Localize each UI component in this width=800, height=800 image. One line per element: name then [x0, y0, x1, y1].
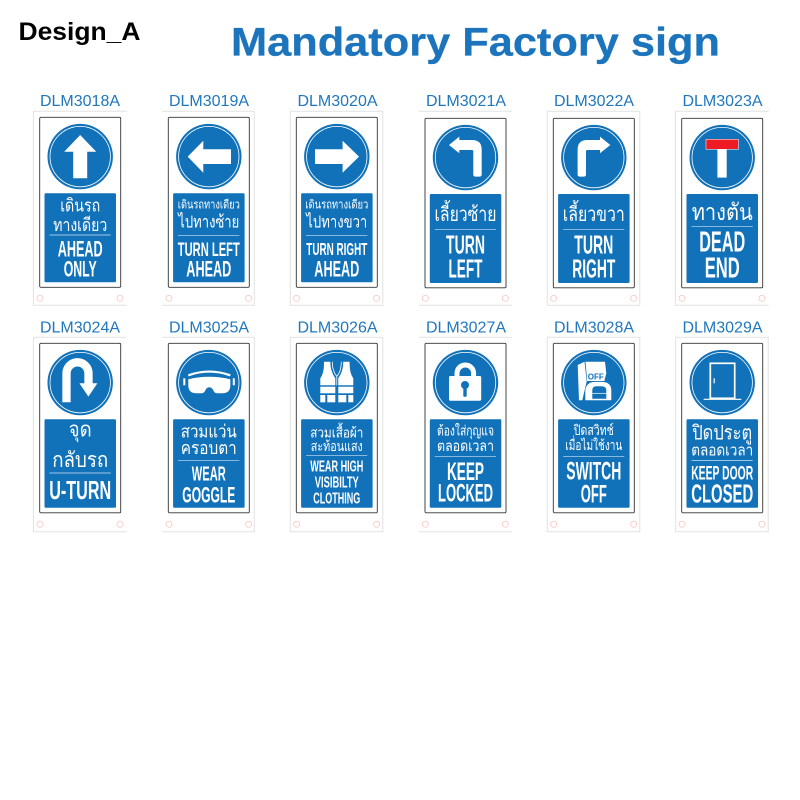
sign frame: [553, 118, 634, 288]
text panel: สวมแว่น: [181, 422, 237, 442]
title: Mandatory Factory sign: [231, 20, 720, 64]
text panel: เดินรถ: [60, 196, 100, 216]
icon: goggles: [176, 350, 242, 415]
sign: turn left ahead: [162, 111, 254, 305]
text panel: ครอบตา: [181, 438, 237, 458]
text panel: กลับรถ: [52, 449, 108, 472]
design label: Design_A: [18, 18, 140, 46]
panel outline: [290, 111, 383, 305]
text panel: [301, 193, 373, 282]
icon: right turn arrow: [561, 125, 626, 190]
text panel: [430, 419, 501, 508]
sign frame: [40, 343, 121, 513]
sign frame: [682, 118, 763, 288]
code label DLM3020A: DLM3020A: [297, 93, 378, 110]
panel outline: [33, 337, 127, 532]
panel outline: [162, 111, 254, 305]
code label DLM3029A: DLM3029A: [682, 320, 763, 336]
text panel: ปิดประตู: [692, 422, 752, 445]
text panel: CLOSED: [691, 478, 753, 508]
sign: keep locked: [419, 337, 512, 532]
mounting holes: [679, 521, 765, 527]
sign frame: [553, 343, 634, 513]
icon: safety vest: [304, 350, 370, 415]
text panel: [430, 194, 501, 283]
text panel: AHEAD: [186, 257, 231, 282]
panel outline: [290, 337, 383, 532]
text panel: ตลอดเวลา: [437, 438, 494, 455]
code label DLM3021A: DLM3021A: [426, 93, 506, 110]
text panel: ปิดสวิทช์: [573, 422, 614, 438]
icon: dead end T: [690, 125, 755, 190]
sign: ahead only: [33, 111, 127, 305]
sign: dead end: [675, 111, 769, 305]
sign frame: [168, 117, 249, 287]
mounting holes: [551, 295, 637, 301]
mounting holes: [294, 295, 380, 301]
icon: left turn arrow: [433, 125, 498, 190]
text panel: [558, 194, 630, 283]
icon: up arrow: [48, 124, 113, 189]
text panel: เมื่อไม่ใช้งาน: [565, 436, 623, 453]
panel outline: [547, 111, 640, 305]
icon: right arrow: [304, 124, 370, 189]
text panel: AHEAD: [58, 237, 103, 262]
text panel: TURN: [446, 229, 485, 259]
sign: wear high visibility clothing: [290, 337, 383, 532]
sign frame: [425, 118, 506, 288]
panel outline: [419, 111, 512, 305]
text panel: CLOTHING: [313, 490, 360, 507]
mounting holes: [679, 295, 765, 301]
text panel: สะท้อนแสง: [311, 438, 363, 454]
text panel: ตลอดเวลา: [691, 443, 753, 460]
text panel: KEEP: [447, 459, 484, 486]
sign frame: [682, 343, 763, 513]
code label DLM3019A: DLM3019A: [169, 93, 249, 110]
text panel: [173, 193, 245, 282]
text panel: [301, 419, 373, 508]
panel outline: [547, 337, 640, 532]
icon: off switch machine: OFF: [588, 372, 604, 382]
text panel: ไปทางขวา: [305, 211, 367, 231]
text panel: OFF: [581, 481, 607, 508]
icon: door: [690, 350, 755, 415]
mounting holes: [37, 521, 123, 527]
sign frame: [296, 343, 377, 513]
panel outline: [676, 337, 768, 532]
text panel: DEAD: [699, 227, 745, 259]
code label DLM3023A: DLM3023A: [682, 93, 763, 110]
text panel: TURN RIGHT: [306, 239, 367, 259]
text panel: [558, 419, 630, 508]
text panel: จุด: [69, 419, 92, 443]
code label DLM3026A: DLM3026A: [297, 320, 378, 336]
text panel: GOGGLE: [182, 482, 235, 507]
panel outline: [162, 337, 254, 532]
sign: turn right: [547, 111, 640, 305]
sign: keep door closed: [676, 337, 768, 532]
sign: switch off: [547, 337, 640, 532]
mounting holes: [422, 521, 508, 527]
sign: u-turn: [33, 337, 127, 532]
code label DLM3025A: DLM3025A: [169, 320, 249, 336]
sign frame: [425, 343, 506, 513]
sign frame: [296, 117, 377, 287]
text panel: RIGHT: [572, 253, 615, 283]
sign: wear goggle: [162, 337, 254, 532]
text panel: AHEAD: [314, 257, 359, 282]
text panel: WEAR HIGH: [310, 459, 363, 476]
text panel: [44, 193, 116, 282]
text panel: เดินรถทางเดียว: [178, 197, 240, 211]
text panel: SWITCH: [566, 458, 621, 485]
sign frame: [40, 117, 121, 287]
code label DLM3028A: DLM3028A: [554, 320, 634, 336]
text panel: เดินรถทางเดียว: [305, 197, 368, 211]
text panel: TURN: [574, 229, 613, 259]
icon: off switch machine: [561, 350, 626, 415]
mounting holes: [294, 521, 380, 527]
mounting holes: [551, 521, 637, 527]
mounting holes: [37, 295, 123, 301]
text panel: LOCKED: [438, 481, 493, 508]
text panel: เลี้ยวขวา: [563, 200, 625, 226]
text panel: LEFT: [448, 253, 483, 283]
icon: u-turn arrow: [48, 350, 113, 415]
text panel: U-TURN: [49, 475, 111, 505]
text panel: ทางเดียว: [53, 215, 107, 235]
sign frame: [168, 343, 249, 513]
panel outline: [33, 111, 127, 305]
text panel: [686, 194, 758, 285]
panel outline: [419, 337, 512, 532]
text panel: ไปทางซ้าย: [177, 211, 239, 231]
icon: padlock: [433, 350, 498, 415]
text panel: TURN LEFT: [178, 240, 240, 261]
mounting holes: [422, 295, 508, 301]
text panel: [44, 419, 116, 508]
text panel: VISIBILTY: [315, 474, 359, 491]
code label DLM3018A: DLM3018A: [40, 93, 120, 110]
mounting holes: [166, 521, 252, 527]
sign: turn left: [419, 111, 512, 305]
text panel: ต้องใส่กุญแจ: [437, 423, 494, 440]
code label DLM3027A: DLM3027A: [426, 320, 506, 336]
code label DLM3022A: DLM3022A: [554, 93, 634, 110]
text panel: สวมเสื้อผ้า: [310, 423, 363, 441]
sign: turn right ahead: [290, 111, 383, 305]
code label DLM3024A: DLM3024A: [40, 320, 120, 336]
text panel: END: [705, 253, 740, 285]
text panel: ทางตัน: [692, 199, 753, 225]
text panel: [686, 419, 758, 508]
icon: left arrow: [176, 124, 242, 189]
text panel: [173, 419, 245, 508]
text panel: ONLY: [64, 257, 97, 282]
mounting holes: [166, 295, 252, 301]
text panel: เลี้ยวซ้าย: [434, 200, 496, 226]
text panel: WEAR: [192, 464, 226, 486]
panel outline: [675, 111, 769, 305]
